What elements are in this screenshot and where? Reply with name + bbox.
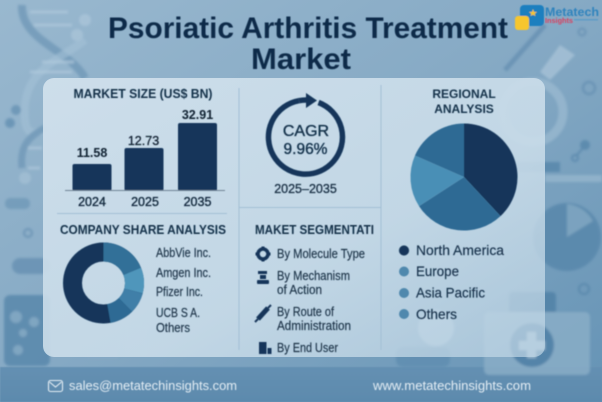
bar values [77,108,213,160]
segment labels: By Route of [277,305,334,319]
segment labels: By End User [277,341,338,355]
bar values: 11.58 [77,146,107,160]
main card panel [43,78,545,357]
legend [399,242,504,322]
heading: regional: REGIONAL [432,87,496,101]
axis years [78,195,211,209]
pie chart [410,124,517,231]
icon: gear [256,246,270,262]
ring arrow [268,93,342,174]
segment labels: Administration [277,319,351,333]
bar values: 32.91 [182,108,213,122]
icon: building [259,342,272,354]
panel: company share analysis [60,223,226,335]
segment labels [277,247,365,355]
email: sales@metatechinsights.com [69,378,237,393]
website: www.metatechinsights.com [372,378,531,393]
company names: AbbVie Inc. [156,246,211,260]
axis years: 2024 [78,195,106,209]
icon: mail [48,380,62,392]
CAGR period: 2025–2035 [274,182,337,196]
heading: regional: ANALYSIS [434,102,494,116]
company names [156,246,211,335]
company names: Others [156,321,190,335]
heading: regional [432,87,496,116]
axis years: 2025 [131,195,159,209]
company names: Amgen Inc. [156,266,211,280]
heading: company share: COMPANY SHARE ANALYSIS [60,223,226,237]
bar values: 12.73 [128,134,159,148]
donut chart [72,252,135,314]
CAGR value: CAGR [283,123,329,140]
logo: Metatech Insights: Metatech [545,5,599,19]
logo: Metatech Insights [515,5,599,30]
company names: Pfizer Inc. [156,285,203,299]
heading: market size: MARKET SIZE (US$ BN) [74,87,212,101]
logo: Metatech Insights: Insights [545,18,573,25]
panel: CAGR [268,93,342,196]
panel: CAGR: 9.96% [284,141,328,158]
legend: Asia Pacific [416,284,485,300]
company names: UCB S A. [156,306,200,320]
title [108,12,508,76]
icon: mechanism [257,271,269,284]
footer band [0,367,602,402]
segment labels: of Action [277,283,322,297]
panel dividers [57,85,381,350]
footer contacts [48,378,531,393]
legend: North America [416,242,504,258]
legend: Others [416,306,457,322]
segment labels: By Molecule Type [277,247,365,261]
title: Psoriatic Arthritis Treatment [108,12,508,45]
panel: market size bar chart [65,87,225,209]
heading: segmentation: MAKET SEGMENTATI [255,223,374,237]
panel: regional analysis [399,87,517,322]
axis years: 2035 [184,195,211,209]
panel: market segmentation [255,223,374,355]
icon: syringe [255,305,271,322]
segment labels: By Mechanism [277,269,350,283]
title: Market [251,43,351,76]
legend: Europe [416,263,459,279]
bars [72,123,217,191]
